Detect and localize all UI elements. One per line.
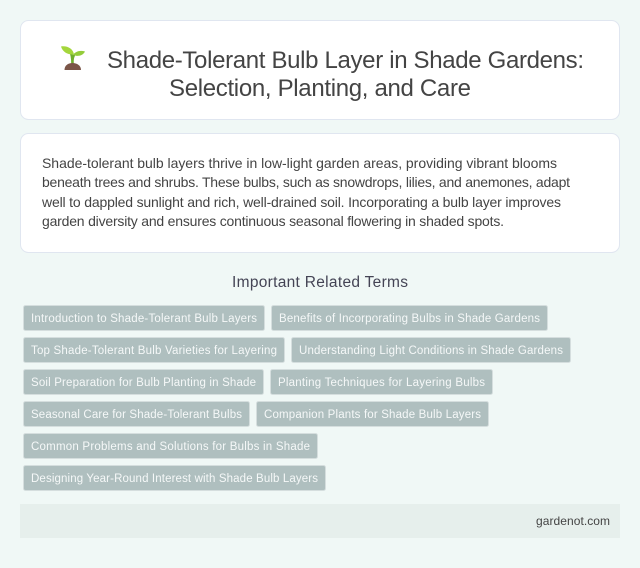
footer bar: gardenot.com [536, 514, 610, 528]
heading: related terms: Important Related Terms [232, 274, 408, 291]
tag [24, 402, 250, 426]
panel: intro paragraph: garden diversity and ensures continuous seasonal flowering in shaded spots. [42, 213, 504, 229]
tag [24, 306, 264, 330]
panel: intro paragraph [20, 134, 620, 252]
title: Shade-Tolerant Bulb Layer in Shade Gardens: [107, 47, 584, 74]
tag: Benefits of Incorporating Bulbs in Shade Gardens [279, 313, 540, 325]
tag: Companion Plants for Shade Bulb Layers [264, 409, 481, 421]
title: Selection, Planting, and Care [169, 75, 471, 102]
tag [24, 434, 318, 458]
tag [292, 338, 570, 362]
footer bar [20, 504, 620, 538]
tag [272, 306, 548, 330]
tag [270, 370, 492, 394]
tag: Common Problems and Solutions for Bulbs in Shade [31, 441, 310, 453]
panel: intro paragraph: well to dappled sunlight and rich, well-drained soil. Incorporating a bulb layer improves [41, 194, 561, 210]
tag [24, 338, 284, 362]
tag: Understanding Light Conditions in Shade Gardens [299, 345, 563, 357]
tag [256, 402, 488, 426]
tag: Designing Year-Round Interest with Shade Bulb Layers [31, 473, 318, 485]
tag [24, 466, 326, 490]
icon: seedling [61, 46, 85, 70]
panel: intro paragraph: beneath trees and shrubs. These bulbs, such as snowdrops, lilies, and anemones, adapt [42, 174, 570, 190]
tag: Seasonal Care for Shade-Tolerant Bulbs [31, 409, 242, 421]
panel: title card [20, 20, 620, 120]
tag: Top Shade-Tolerant Bulb Varieties for Layering [31, 345, 277, 357]
panel: intro paragraph: Shade-tolerant bulb layers thrive in low-light garden areas, providing vibrant blooms [42, 155, 557, 171]
tag [24, 370, 264, 394]
tag: Soil Preparation for Bulb Planting in Shade [31, 377, 256, 389]
tag: Planting Techniques for Layering Bulbs [278, 377, 485, 389]
title [107, 47, 584, 102]
tag list [24, 306, 570, 490]
tag: Introduction to Shade-Tolerant Bulb Layers [31, 313, 257, 325]
